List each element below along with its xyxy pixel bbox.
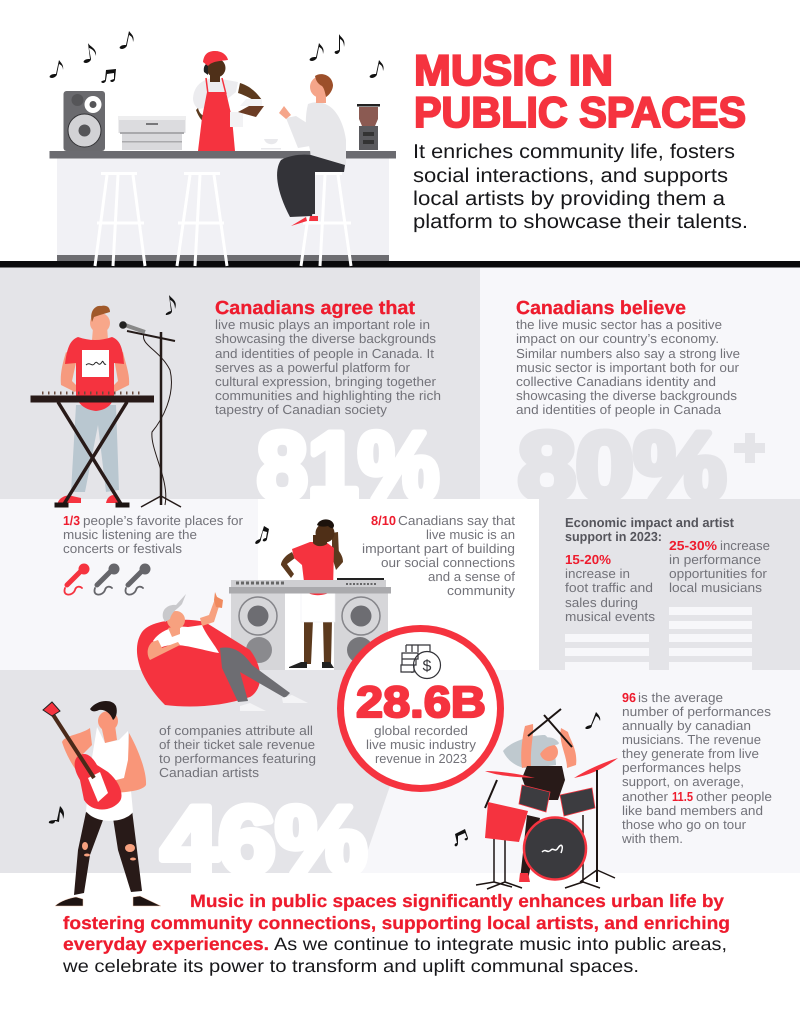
text block: 96 performances: performances helps xyxy=(622,760,742,775)
caption xyxy=(366,723,477,766)
shoes xyxy=(240,695,308,711)
caption: revenue in 2023 xyxy=(375,751,467,766)
head xyxy=(101,725,117,743)
music notes xyxy=(455,712,600,846)
microphone xyxy=(125,325,145,332)
shoes xyxy=(55,896,161,906)
stands xyxy=(476,770,615,889)
bars: decorative columns xyxy=(565,607,752,670)
text block: Canadians agree that xyxy=(215,298,441,417)
panel: lower left background xyxy=(0,670,430,873)
stat: 25-30%: local musicians xyxy=(669,580,763,595)
conclusion text: Music in public spaces significantly enhances urban life by xyxy=(190,891,724,911)
coffee cup xyxy=(261,139,281,150)
t-shirt xyxy=(153,625,219,653)
callout: 28.6B revenue xyxy=(340,628,500,788)
text block: 1/3 favorite places: concerts or festivals xyxy=(63,541,183,556)
text block: 8/10 Canadians: Canadians say that xyxy=(398,513,515,528)
body: Canadians agree: and identities of people in Canada. It xyxy=(215,346,434,361)
legs xyxy=(74,810,142,895)
leg xyxy=(520,815,540,880)
illustration: guitarist xyxy=(43,701,161,906)
panel: social connections background xyxy=(258,499,539,670)
legs xyxy=(220,647,290,702)
text block: companies ticket revenue: of their ticket sale revenue xyxy=(159,737,315,752)
text block: 96 performances: those who go on tour xyxy=(622,817,747,832)
panel: Canadians agree background xyxy=(0,267,480,499)
text block: Canadians believe xyxy=(516,298,740,417)
head xyxy=(92,326,108,344)
conclusion text: As we continue to integrate music into public areas, xyxy=(274,934,727,954)
speakers xyxy=(231,593,285,670)
text block: 1/3 favorite places: music listening are the xyxy=(63,527,197,542)
face xyxy=(540,743,558,761)
arms xyxy=(521,724,576,768)
bar stools xyxy=(95,174,351,266)
music notes xyxy=(50,31,384,83)
t-shirt xyxy=(65,337,124,411)
arm xyxy=(97,733,146,793)
body: Canadians believe: and identities of people in Canada xyxy=(516,402,722,417)
body: Canadians believe xyxy=(516,317,740,417)
caption: live music industry xyxy=(366,737,477,752)
grinder xyxy=(357,104,380,150)
music note xyxy=(255,526,269,544)
illustration: cafe scene xyxy=(50,31,396,266)
stat: 15-20%: 15-20% xyxy=(565,552,611,567)
counter base xyxy=(57,255,389,261)
circle xyxy=(340,628,500,788)
heading: economic impact: Economic impact and artist xyxy=(565,515,735,530)
head xyxy=(313,535,327,546)
title xyxy=(414,47,746,137)
text block: 96 performances: musicians. The revenue xyxy=(622,732,761,747)
body: Canadians agree: showcasing the diverse backgrounds xyxy=(215,331,437,346)
keyboard xyxy=(30,396,154,402)
text block: economic impact xyxy=(565,515,770,670)
shirt print xyxy=(82,350,109,377)
panel: Canadians believe background xyxy=(480,267,800,499)
text block: 96 performances: they generate from live xyxy=(622,746,759,761)
body: Canadians believe: collective Canadians identity and xyxy=(516,374,716,389)
body: Canadians agree: tapestry of Canadian society xyxy=(215,402,388,417)
big number: 80%+: 80% xyxy=(518,413,726,520)
bass drum xyxy=(524,818,586,880)
intro text: local artists by providing them a xyxy=(413,188,726,210)
body: Canadians agree: cultural expression, bringing together xyxy=(215,374,437,389)
illustration: keyboard player xyxy=(30,295,181,507)
icon: gray microphone xyxy=(94,564,120,595)
shoes xyxy=(58,495,119,503)
coffee machine xyxy=(118,116,186,150)
drum logo xyxy=(542,845,562,853)
heading: economic impact: support in 2023: xyxy=(565,529,662,544)
text block: 96 performances: is the average xyxy=(638,690,723,705)
stat: 15-20%: foot traffic and xyxy=(565,580,653,595)
feet xyxy=(55,503,129,507)
text block: 96 performances: number of performances xyxy=(622,704,772,719)
keyboard keys xyxy=(42,392,140,394)
shorts xyxy=(301,593,335,622)
t-shirt xyxy=(292,542,334,595)
body: Canadians believe: impact on our country’s economy. xyxy=(516,331,719,346)
hair fringe xyxy=(535,737,559,754)
black top xyxy=(522,766,565,800)
sticks xyxy=(528,709,572,747)
text block: 1/3 favorite places: people’s favorite places for xyxy=(83,513,244,528)
tank top xyxy=(86,727,133,821)
guitar body xyxy=(75,754,122,810)
body: Canadians agree: serves as a powerful platform for xyxy=(215,360,411,375)
text block: 8/10 Canadians: live music is an xyxy=(426,527,515,542)
speaker cones xyxy=(239,597,380,663)
stat: 15-20% xyxy=(565,552,656,624)
text block: companies ticket revenue: to performances featuring xyxy=(159,751,316,766)
headstock xyxy=(43,702,60,716)
title: MUSIC IN xyxy=(414,47,613,95)
hair xyxy=(503,735,556,768)
text block: 96 performances: 11.5 xyxy=(672,789,693,804)
body: Canadians agree: live music plays an important role in xyxy=(215,317,430,332)
text block: 96 performances: another xyxy=(622,789,669,804)
text block: 96 performances: support, on average, xyxy=(622,774,744,789)
text block: 96 performances: other people xyxy=(696,789,772,804)
text block: 96 performances: like band members and xyxy=(622,803,763,818)
stat: 15-20%: sales during xyxy=(565,595,638,610)
intro text: It enriches community life, fosters xyxy=(413,141,735,163)
illustration: DJ xyxy=(229,519,391,670)
body: Canadians agree: communities and highlighting the rich xyxy=(215,388,441,403)
body: Canadians agree xyxy=(215,317,441,417)
cymbals xyxy=(485,758,618,778)
big number: 81%: 81% xyxy=(257,413,439,520)
stat: 15-20%: increase in xyxy=(565,566,630,581)
stat: 25-30%: opportunities for xyxy=(669,566,768,581)
barista xyxy=(193,51,264,151)
icon: coins and dollar: $ xyxy=(423,658,432,675)
panel: footer background xyxy=(0,873,800,1035)
text block: 8/10 Canadians: community xyxy=(447,583,516,598)
panel: lower right background xyxy=(258,670,800,873)
icon: coins and dollar xyxy=(401,645,440,678)
head xyxy=(167,611,185,629)
arms xyxy=(281,545,343,578)
text block: 8/10 Canadians: our social connections xyxy=(381,555,516,570)
text block: companies ticket revenue xyxy=(159,723,316,780)
heading: economic impact xyxy=(565,515,735,544)
text block: companies ticket revenue: of companies attribute all xyxy=(159,723,313,738)
text block: 8/10 Canadians xyxy=(362,513,516,598)
speaker xyxy=(64,91,105,151)
value: 28.6B xyxy=(356,678,486,727)
stat: 25-30%: 25-30% xyxy=(669,538,717,553)
pants xyxy=(71,405,119,492)
music note xyxy=(166,295,176,315)
icon: red microphone xyxy=(64,564,90,595)
stat: 25-30% xyxy=(669,538,770,595)
conclusion text: we celebrate its power to transform and uplift communal spaces. xyxy=(62,956,639,976)
icons: three microphones xyxy=(64,564,150,595)
arms xyxy=(148,596,221,660)
intro text: social interactions, and supports xyxy=(413,165,728,187)
icon: gray microphone xyxy=(125,564,150,595)
illustration: drummer xyxy=(455,709,618,889)
knee tears xyxy=(82,842,136,860)
text block: 8/10 Canadians: 8/10 xyxy=(371,513,396,528)
divider band xyxy=(0,261,800,268)
shoes xyxy=(289,662,334,668)
panel: favorite places background xyxy=(0,499,258,670)
music note xyxy=(49,806,64,824)
body: Canadians believe: Similar numbers also say a strong live xyxy=(516,346,740,361)
text block: 1/3 favorite places: 1/3 xyxy=(63,513,80,528)
conclusion text: fostering community connections, supporting local artists, and enriching xyxy=(63,913,730,933)
red drum xyxy=(485,802,528,842)
arms xyxy=(61,352,129,392)
heading: Canadians believe: Canadians believe xyxy=(516,298,686,319)
beanbag xyxy=(137,620,260,706)
body: Canadians believe: music sector is important both for our xyxy=(516,360,740,375)
counter body xyxy=(57,158,389,255)
stat: 25-30%: increase xyxy=(720,538,770,553)
intro text: platform to showcase their talents. xyxy=(413,211,748,233)
text block: 96 performances: 96 xyxy=(622,690,636,705)
keyboard stand xyxy=(58,402,127,504)
counter top xyxy=(50,151,396,158)
text block: companies ticket revenue: Canadian artists xyxy=(159,765,260,780)
stat: 25-30%: in performance xyxy=(669,552,761,567)
seated customer xyxy=(277,74,346,226)
body: Canadians believe: the live music sector has a positive xyxy=(516,317,722,332)
text block: 8/10 Canadians: and a sense of xyxy=(428,569,515,584)
microphone stand xyxy=(127,331,181,507)
illustration: man on beanbag xyxy=(137,592,308,711)
DJ deck xyxy=(229,578,391,594)
text block: 96 performances: with them. xyxy=(621,831,683,846)
body: Canadians believe: showcasing the diverse backgrounds xyxy=(516,388,738,403)
legs xyxy=(304,620,332,664)
title: PUBLIC SPACES xyxy=(414,89,746,137)
caption: global recorded xyxy=(374,723,468,738)
toms xyxy=(519,785,550,812)
stat: 15-20%: musical events xyxy=(565,609,656,624)
intro text xyxy=(413,141,748,233)
big number: 46%: 46% xyxy=(161,787,367,894)
text block: 96 performances xyxy=(621,690,772,846)
cap xyxy=(163,594,186,622)
text block: 96 performances: annually by canadian xyxy=(622,718,751,733)
guitar neck xyxy=(50,710,94,778)
text block: 1/3 favorite places xyxy=(63,513,244,556)
panel: economic impact background xyxy=(539,499,800,670)
heading: Canadians agree that: Canadians agree that xyxy=(215,298,416,319)
conclusion text: everyday experiences. xyxy=(63,934,269,954)
text block: 8/10 Canadians: important part of building xyxy=(362,541,515,556)
conclusion text xyxy=(62,891,730,976)
